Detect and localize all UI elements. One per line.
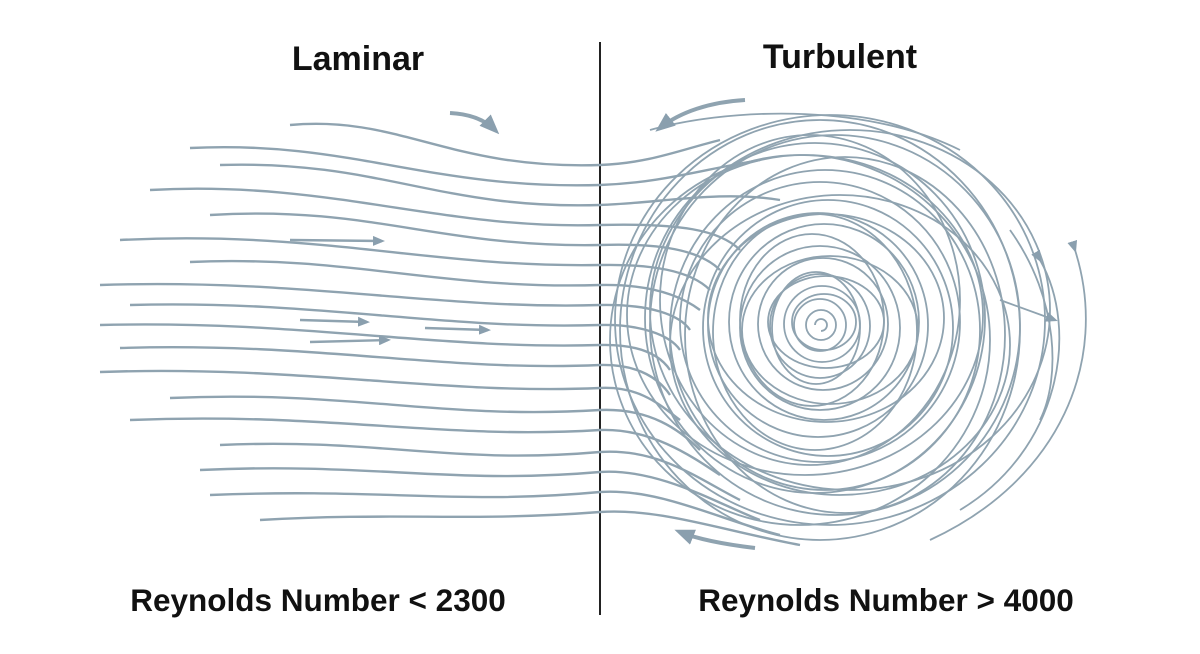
- label: Reynolds laminar: Reynolds Number < 2300: [130, 582, 506, 618]
- divider: [599, 42, 601, 615]
- laminar streamlines: [100, 124, 800, 545]
- title: Turbulent: Turbulent: [763, 38, 917, 76]
- big arrows turbulent: [660, 100, 755, 548]
- title: Laminar: Laminar: [292, 40, 424, 78]
- flow arrows laminar: [290, 113, 495, 342]
- turbulent eddy: [610, 114, 1086, 540]
- label: Reynolds turbulent: Reynolds Number > 4000: [698, 582, 1074, 618]
